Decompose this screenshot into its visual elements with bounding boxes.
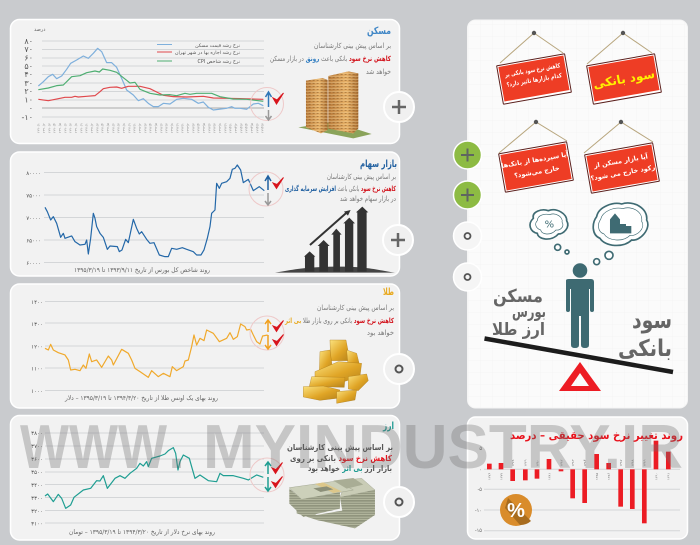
dollar rate line [45, 448, 263, 508]
sign: housing recession [584, 120, 660, 194]
gold chart caption: روند بهای یک اونس طلا از تاریخ ۱۳۹۴/۳/۲۰ تا ۱۳۹۵/۳/۱۹ – دلار [64, 394, 218, 402]
currency chart: ۳۵۰۰ [31, 470, 43, 476]
housing chart axis dates: ۱۳۹۰/۹ [79, 123, 83, 133]
housing chart axis dates: ۱۳۹۱/۲ [90, 123, 94, 133]
label: bank interest: بانکی [618, 336, 672, 362]
housing chart axis dates: ۱۳۹۳/۱ [181, 123, 185, 133]
illustration: gold bars [303, 340, 368, 403]
stock chart: ۸۰۰۰۰ [26, 171, 41, 177]
housing chart axis dates: ۱۳۹۲/۴ [149, 123, 153, 133]
housing description: خواهد شد [366, 68, 391, 76]
housing chart axis dates: ۱۳۹۲/۷ [165, 123, 169, 133]
housing chart axis dates: ۱۳۹۱/۳ [95, 123, 99, 133]
right panel background [468, 20, 688, 408]
housing chart: ۸۰ [24, 37, 33, 46]
icon: percent badge [500, 494, 532, 526]
rate bar year labels: ۱۳۷۶ [488, 473, 492, 480]
stock chart caption: روند شاخص کل بورس از تاریخ ۱۳۹۳/۹/۱۱ تا ۱۳۹۵/۳/۱۹ [74, 266, 210, 274]
rate bar year labels: ۱۳۸۴ [583, 459, 587, 467]
watermark: MYINDUSTRY.IR [203, 413, 683, 482]
sign: housing recession: رکود خارج می شود؟ [590, 163, 656, 183]
icon: percent badge: % [507, 500, 525, 522]
rate bar year labels: ۱۳۷۷ [499, 473, 503, 480]
housing chart axis dates: ۱۳۹۴/۷ [261, 123, 265, 133]
rate bar year labels: ۱۳۸۷ [619, 459, 623, 467]
housing chart axis dates: ۱۳۹۰/۱ [37, 123, 41, 133]
button: green plus one [454, 141, 482, 169]
button: expand stocks [383, 225, 413, 255]
housing chart axis dates: ۱۳۹۰/۴ [53, 123, 57, 133]
housing description: کاهش نرخ سود بانکی باعث رونق در بازار مسکن [270, 55, 392, 63]
sign: which markets: کدام بازارها تاثیر دارد؟ [506, 72, 563, 89]
stock panel background [10, 152, 400, 276]
label: bank interest: سود [632, 308, 672, 334]
rate bar year labels: ۱۳۸۹ [643, 459, 647, 467]
illustration: money stacks [289, 478, 375, 528]
seesaw beam [484, 338, 673, 372]
housing chart axis dates: ۱۳۹۴/۱ [229, 123, 233, 133]
housing chart lines [38, 48, 263, 110]
housing chart axis dates: ۱۳۹۲/۶ [159, 123, 163, 133]
housing chart axis dates: ۱۳۹۲/۹ [175, 123, 179, 133]
housing chart legend: نرخ رشد قیمت مسکن [195, 43, 240, 49]
gold chart: ۱۲۰۰ [31, 344, 43, 350]
housing chart legend: نرخ رشد اجاره بها در شهر تهران [175, 50, 240, 56]
rate bar year labels: ۱۳۸۱ [547, 473, 551, 480]
gold description: کاهش نرخ سود بانکی بر روی بازار طلا بی اثر [284, 317, 395, 325]
housing description: بر اساس پیش بینی کارشناسان [314, 42, 391, 50]
housing chart: درصد [34, 27, 46, 33]
stock chart: ۷۵۰۰۰ [26, 194, 41, 200]
gold up-down indicator [250, 316, 284, 350]
label: housing, stocks, currency, gold: ارز طلا [492, 320, 545, 340]
housing chart axis dates: ۱۳۹۲/۸ [170, 123, 174, 133]
housing chart axis dates: ۱۳۹۳/۷ [213, 123, 217, 133]
stock index line [45, 165, 264, 257]
housing chart axis dates: ۱۳۹۲/۲ [138, 123, 142, 133]
stock description: در بازار سهام خواهد شد [340, 195, 396, 203]
housing chart axis dates: ۱۳۹۴/۴ [245, 123, 249, 133]
rate chart grid and axis: ۵ [479, 446, 482, 452]
rate bar year labels: ۱۳۸۸ [631, 459, 635, 467]
sign: bank deposits: آیا سپرده‌ها از بانک‌ها [500, 149, 570, 170]
panel: questions and seesaw [468, 20, 688, 408]
currency chart: ۳۲۰۰ [31, 509, 43, 515]
button: neutral currency [384, 487, 414, 517]
rate bar year labels: ۱۳۷۸ [511, 459, 515, 467]
housing chart: ۵۰ [24, 62, 33, 71]
housing chart: ۲۰ [24, 87, 33, 96]
label: housing, stocks, currency, gold [492, 286, 546, 340]
rate bar year labels: ۱۳۸۰ [535, 459, 539, 467]
watermark: . [168, 413, 185, 482]
button: neutral gold [384, 354, 414, 384]
rate chart grid and axis: -۱۵ [475, 528, 482, 534]
housing chart axis dates: ۱۳۹۴/۲ [234, 123, 238, 133]
housing up-down indicator [250, 88, 284, 120]
gold description: بر اساس پیش بینی کارشناسان [317, 304, 394, 312]
currency description: بازار ارز بی اثر خواهد بود [308, 464, 392, 473]
gold heading: طلا [383, 287, 394, 298]
stock description: بر اساس پیش بینی کارشناسان [327, 173, 396, 181]
housing chart axis dates: ۱۳۹۴/۳ [239, 123, 243, 133]
housing chart axis dates: ۱۳۹۱/۴ [101, 123, 105, 133]
housing chart axis dates: ۱۳۹۳/۳ [191, 123, 195, 133]
sign: which markets [496, 31, 572, 105]
housing chart axis dates: ۱۳۹۰/۶ [63, 123, 67, 133]
housing chart axis dates: ۱۳۹۲/۱ [133, 123, 137, 133]
seesaw fulcrum [559, 362, 601, 391]
button: neutral one [454, 222, 482, 250]
rate bar chart [487, 441, 671, 523]
housing chart axis dates: ۱۳۹۳/۴ [197, 123, 201, 133]
rate panel background [468, 417, 688, 539]
housing chart: ۴۰ [24, 70, 33, 79]
thought clouds [530, 203, 648, 265]
housing chart axis dates: ۱۳۹۰/۳ [47, 123, 51, 133]
currency chart: ۳۸۰۰ [31, 431, 43, 437]
label: housing, stocks, currency, gold: بورس [512, 302, 546, 321]
housing chart axis dates: ۱۳۹۱/۶ [111, 123, 115, 133]
housing chart axis dates: ۱۳۹۱/۵ [106, 123, 110, 133]
housing chart axis dates: ۱۳۹۰/۷ [69, 123, 73, 133]
housing chart axis dates: ۱۳۹۴/۵ [250, 123, 254, 133]
currency chart: ۳۷۰۰ [31, 444, 43, 450]
watermark: WWW [20, 413, 167, 482]
stock chart: ۶۰۰۰۰ [26, 261, 41, 267]
housing chart axis dates: ۱۳۹۲/۵ [154, 123, 158, 133]
illustration: apartment towers [298, 71, 372, 138]
gold chart: ۱۱۰۰ [31, 366, 43, 372]
housing chart axis dates: ۱۳۹۳/۹ [223, 123, 227, 133]
housing chart axis dates [37, 123, 265, 133]
gold chart [31, 300, 284, 402]
rate chart grid and axis: ۰ [479, 467, 482, 473]
button: expand housing [384, 92, 414, 122]
rate chart grid and axis: -۵ [478, 487, 482, 493]
housing chart: -۱۰ [22, 113, 33, 122]
housing chart axis dates: ۱۳۹۰/۵ [58, 123, 62, 133]
rate bar year labels: ۱۳۹۱ [667, 473, 671, 480]
sign: bank interest [586, 31, 662, 105]
currency chart caption: روند بهای نرخ دلار از تاریخ ۱۳۹۴/۳/۲۰ تا ۱۳۹۵/۳/۱۹ – تومان [69, 528, 215, 536]
stock chart: ۶۵۰۰۰ [26, 238, 41, 244]
stock heading: بازار سهام [360, 159, 397, 170]
housing chart axis dates: ۱۳۹۰/۲ [42, 123, 46, 133]
gold price line [45, 324, 268, 377]
illustration: rising bars and arrow [275, 207, 395, 273]
housing chart axis dates: ۱۳۹۳/۶ [207, 123, 211, 133]
rate bar year labels: ۱۳۸۶ [607, 473, 611, 480]
housing chart axis dates: ۱۳۹۳/۲ [186, 123, 190, 133]
sign: bank deposits: خارج می‌شود؟ [514, 164, 561, 180]
rate bar year labels: ۱۳۷۹ [524, 459, 528, 467]
housing chart axis dates: ۱۳۹۳/۵ [202, 123, 206, 133]
gold panel background [10, 284, 400, 408]
housing chart axis dates: ۱۳۹۲/۳ [143, 123, 147, 133]
rate chart grid and axis [475, 446, 680, 534]
label: bank interest [618, 308, 672, 362]
currency chart: ۳۴۰۰ [31, 483, 43, 489]
housing heading: مسکن [367, 26, 391, 37]
currency description: کاهش نرخ سود بانکی بر روی [290, 454, 392, 464]
rate bar year labels: ۱۳۸۳ [571, 459, 575, 467]
stock description: کاهش نرخ سود بانکی باعث افزایش سرمایه گذاری [285, 184, 397, 193]
gold description [284, 304, 395, 337]
housing chart axis dates: ۱۳۹۱/۷ [117, 123, 121, 133]
housing chart axis dates: ۱۳۹۱/۱ [85, 123, 89, 133]
rate chart grid and axis: -۱۰ [475, 508, 482, 514]
stock description [285, 173, 397, 203]
rate bar year labels: ۱۳۸۵ [595, 473, 599, 480]
housing chart axis dates: ۱۳۹۱/۹ [127, 123, 131, 133]
label: housing, stocks, currency, gold: مسکن [493, 286, 543, 307]
sign: housing recession: آیا بازار مسکن از [592, 151, 649, 170]
gold chart: ۱۰۰۰ [31, 389, 43, 395]
housing chart: ۷۰ [24, 45, 33, 54]
housing chart: ۳۰ [24, 79, 33, 88]
housing chart axis dates: ۱۳۹۴/۶ [255, 123, 259, 133]
housing chart legend: نرخ رشد شاخص CPI [197, 59, 240, 65]
housing panel background [10, 20, 400, 144]
button: neutral two [454, 263, 482, 291]
currency chart: ۳۶۰۰ [31, 457, 43, 463]
rate bar year labels [488, 459, 671, 480]
panel: real interest rate [468, 417, 688, 539]
sign: bank deposits [498, 120, 574, 193]
housing chart: ۱۰ [24, 96, 33, 104]
currency heading: ارز [382, 421, 394, 432]
housing chart: ۶۰ [24, 54, 33, 62]
currency panel background [10, 416, 400, 540]
rate bar year labels: ۱۳۹۰ [654, 473, 658, 480]
housing description [270, 42, 392, 76]
gold description: خواهد بود [367, 329, 394, 337]
thought clouds: % [545, 219, 554, 230]
housing chart axis dates: ۱۳۹۰/۸ [74, 123, 78, 133]
currency chart: ۳۱۰۰ [31, 522, 43, 528]
gold chart: ۱۳۰۰ [31, 322, 43, 328]
stock chart: ۷۰۰۰۰ [26, 216, 41, 222]
gold chart: ۱۴۰۰ [31, 300, 43, 306]
housing chart legend [157, 43, 240, 65]
rate chart heading: روند تغییر نرخ سود حقیقی – درصد [510, 429, 683, 442]
sign: bank interest: سود بانکی [592, 67, 656, 92]
currency description: بر اساس پیش بینی کارشناسان [287, 443, 393, 453]
housing chart axis dates: ۱۳۹۳/۸ [218, 123, 222, 133]
housing chart [22, 27, 284, 133]
housing chart: ۰ [29, 104, 33, 113]
currency up-down indicator [250, 458, 284, 492]
sign: which markets: کاهش نرخ سود بانکی بر [504, 62, 561, 79]
stock chart [26, 165, 284, 274]
currency chart [31, 431, 284, 536]
stock up-down indicator [249, 172, 284, 206]
currency description [287, 443, 393, 473]
person figure [566, 263, 594, 348]
rate bar year labels: ۱۳۸۲ [559, 459, 563, 467]
currency chart: ۳۳۰۰ [31, 496, 43, 502]
housing chart axis dates: ۱۳۹۱/۸ [122, 123, 126, 133]
button: green plus two [454, 181, 482, 209]
